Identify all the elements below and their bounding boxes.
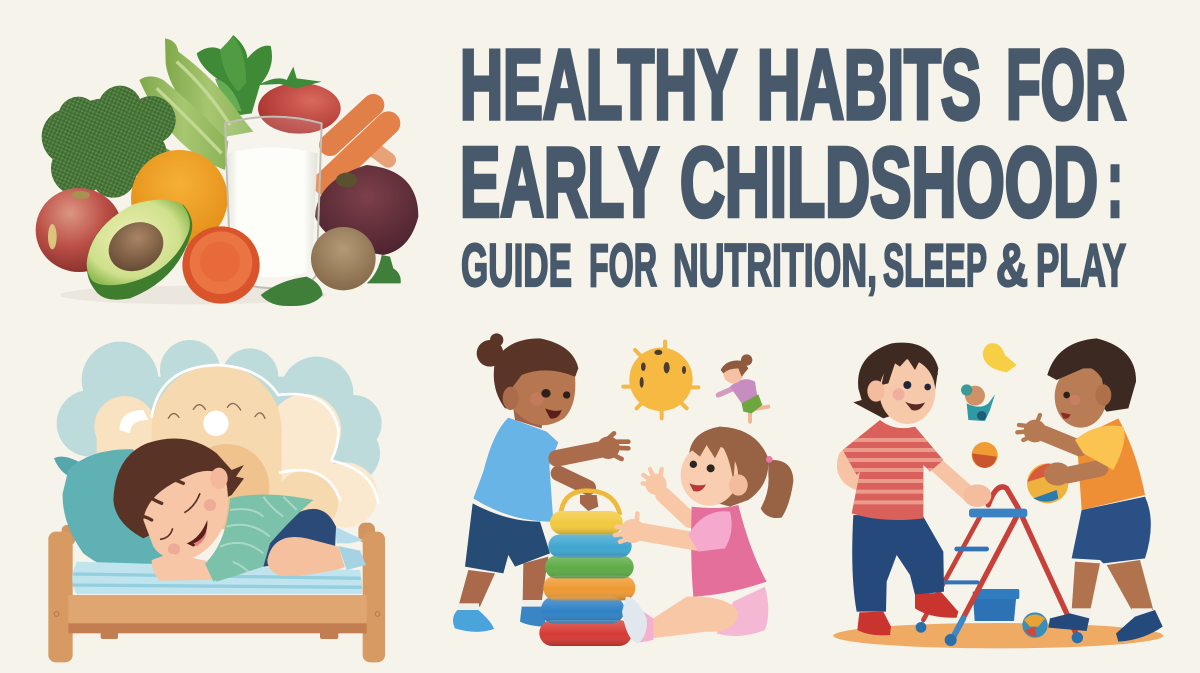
title line 1: HEALTHY: [460, 30, 737, 140]
boy in orange vest: [1017, 338, 1163, 642]
potato: [311, 227, 376, 290]
title line 2: EARLY: [460, 127, 659, 237]
toy ball being held: [1027, 463, 1068, 503]
shoes: [453, 610, 494, 632]
head: [681, 427, 773, 507]
beet: [315, 165, 418, 255]
shorts: [717, 587, 768, 636]
dream clouds: [57, 340, 382, 533]
leg: [267, 537, 345, 576]
broccoli: [42, 86, 182, 198]
sweater: [205, 495, 313, 582]
mattress: [72, 562, 362, 594]
vest: [1077, 418, 1145, 510]
subtitle line: SLEEP: [883, 232, 987, 299]
step ladder: [916, 487, 1083, 646]
arm forward: [640, 532, 697, 542]
subtitle line: &: [996, 232, 1028, 299]
child in blue shirt: [453, 333, 628, 632]
avocado half: [87, 200, 192, 300]
tomato: [258, 67, 341, 134]
orange: [131, 150, 228, 247]
subtitle line: NUTRITION,: [673, 232, 877, 299]
floating toy: plane: [961, 384, 995, 421]
leafy greens: [197, 35, 272, 115]
panel: play scene, stacking rings: [453, 333, 793, 646]
head: [853, 343, 938, 424]
shirt: [473, 418, 558, 522]
socks: [335, 527, 363, 543]
arms: [846, 458, 867, 483]
legs: [458, 570, 495, 607]
subtitle line: FOR: [589, 232, 657, 299]
neck and head: [513, 408, 543, 428]
orange floor mat: [833, 623, 1163, 648]
subtitle line: PLAY: [1036, 232, 1126, 299]
title line 2: [460, 127, 1123, 237]
shorts: [465, 503, 550, 573]
title block: [460, 30, 1126, 299]
boy in striped shirt: [840, 343, 991, 635]
apple: [36, 188, 122, 272]
avocado pit: [100, 213, 172, 281]
ponytail: [761, 460, 793, 518]
arm: [557, 449, 603, 458]
title block: :: [1107, 127, 1123, 237]
shorts: [1072, 497, 1151, 563]
panel: nutrition food group: [36, 35, 418, 306]
icon: small jumping girl: [718, 354, 768, 422]
toddler sleeping: [113, 438, 366, 582]
carrots: [325, 105, 388, 183]
foot sock: [338, 546, 366, 570]
basil leaves: [261, 255, 401, 306]
title line 1: HABITS: [757, 30, 981, 140]
sleeve: [688, 511, 732, 552]
subtitle line: GUIDE: [461, 232, 572, 299]
shorts: [263, 509, 336, 567]
ball on floor: [1022, 612, 1048, 638]
pants: [852, 515, 944, 612]
panel: play scene, step ladder: [833, 338, 1163, 648]
bucket: [973, 589, 1019, 621]
pillow: [54, 449, 170, 575]
ring stacking toy: [539, 491, 635, 646]
panel: sleep illustration: [48, 340, 385, 662]
head: [1047, 338, 1136, 428]
bed frame: [48, 532, 385, 662]
glass of milk: [225, 117, 322, 288]
shoes: [1048, 613, 1089, 631]
hand: [152, 553, 212, 581]
shoes: [857, 612, 891, 635]
floating toy: duck: [983, 343, 1017, 372]
bed back posts: [62, 523, 375, 545]
sleeve: [1075, 426, 1125, 470]
subtitle line: [461, 232, 1126, 299]
vest: [691, 505, 767, 597]
head: [113, 438, 244, 560]
title line 1: [460, 30, 1126, 140]
legs: [1072, 562, 1100, 612]
child in pink vest: [615, 427, 793, 643]
green vegetables: [139, 38, 253, 170]
arms: [1043, 433, 1080, 448]
back arm: [558, 473, 588, 488]
sock and shoe: [640, 612, 653, 642]
striped shirt: [840, 420, 947, 520]
arm up: [663, 495, 690, 520]
leg: [652, 597, 738, 638]
icon: sun: [623, 342, 698, 418]
floating toy: ball: [972, 442, 998, 468]
tomato slice: [182, 226, 260, 304]
